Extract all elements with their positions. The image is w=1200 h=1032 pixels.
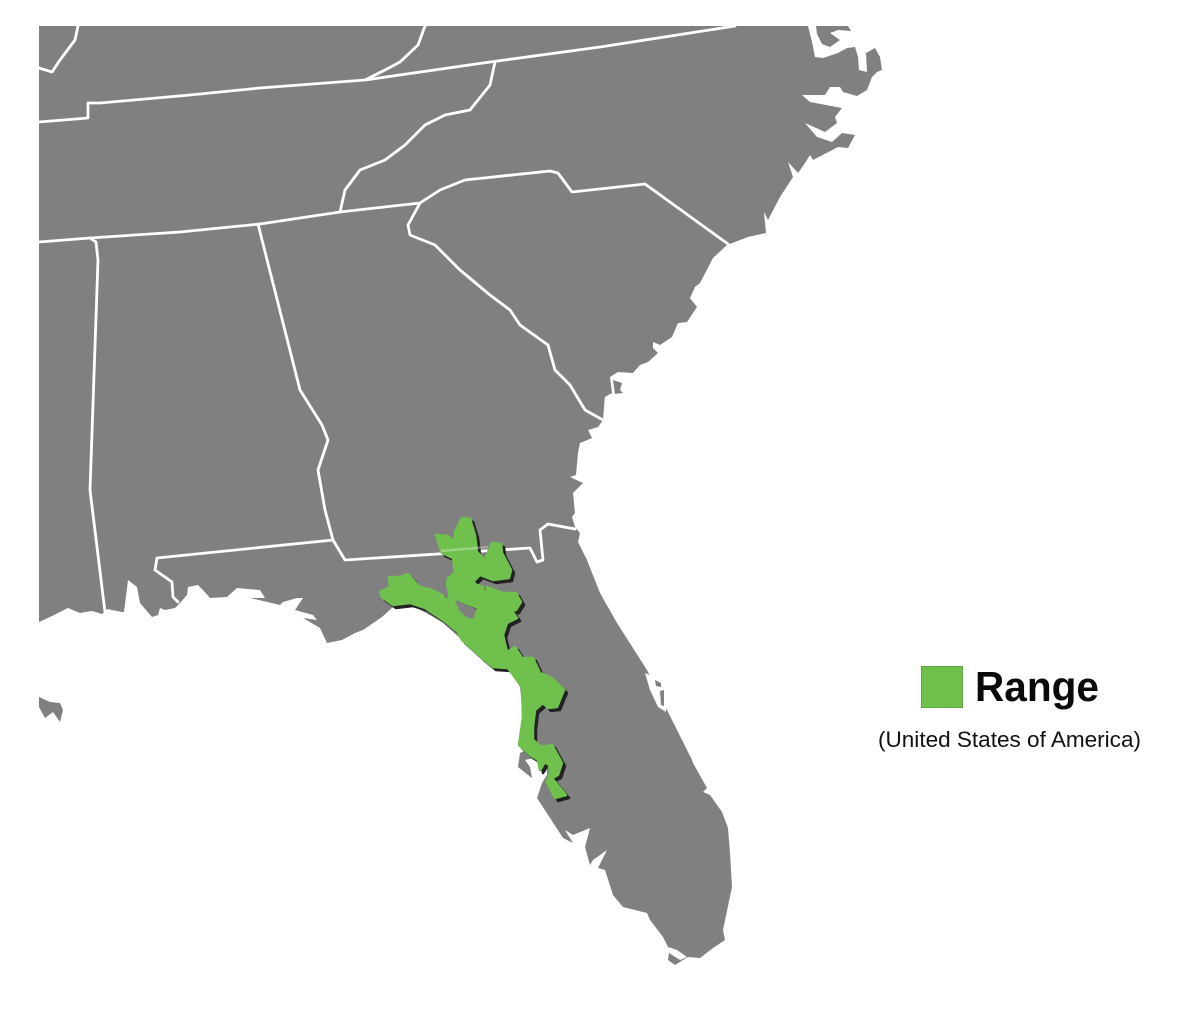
legend (878, 663, 1141, 752)
legend label: Range: Range (975, 663, 1099, 710)
map: Pinellas peninsula (518, 750, 533, 778)
range shadow (383, 521, 569, 801)
range fill (380, 518, 566, 798)
range hole interior (455, 600, 476, 619)
map: Pamlico land blob (816, 26, 851, 47)
map: Louisiana fragment (39, 697, 63, 722)
faint state line across range (441, 547, 488, 551)
legend swatch (922, 666, 962, 708)
map: southeastern United States land (39, 26, 882, 965)
range area with shadow (380, 518, 569, 801)
lagoon barrier islands (655, 680, 664, 706)
Indian River lagoon (645, 673, 666, 712)
map: Sea island (613, 380, 623, 394)
state borders (39, 26, 735, 612)
legend note: country: (United States of America) (878, 727, 1141, 752)
